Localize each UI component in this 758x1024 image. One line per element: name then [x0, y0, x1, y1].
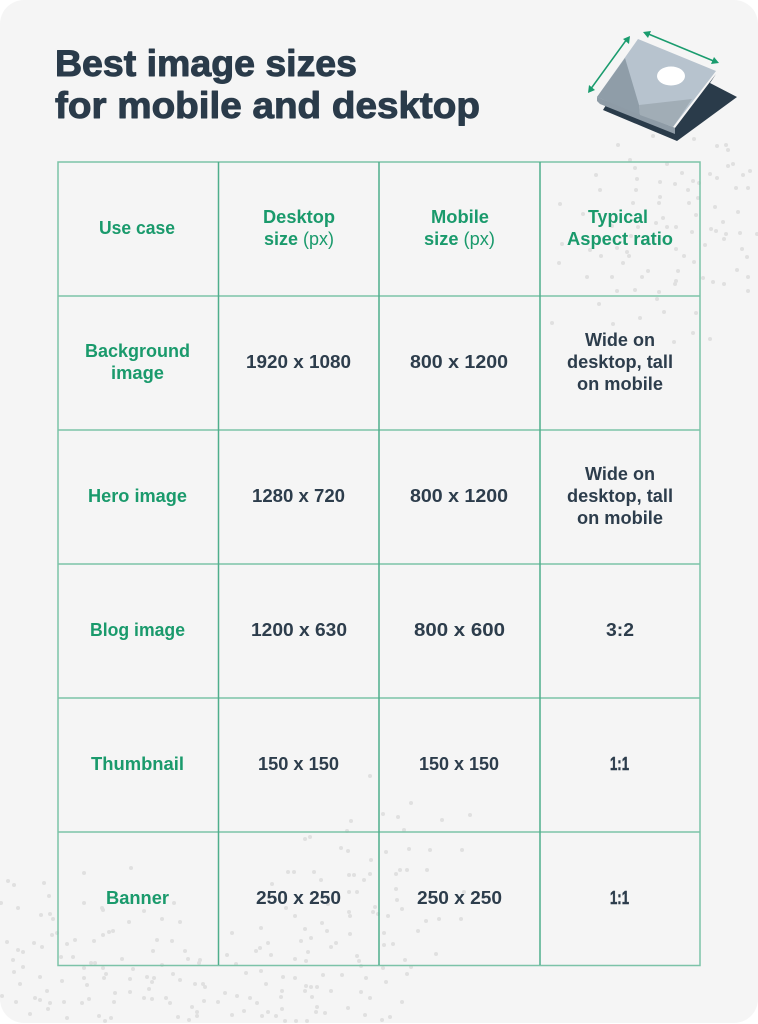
row: banner	[106, 888, 629, 908]
header: aspect ratio: Typical	[588, 207, 648, 227]
aspect ratio: desktop, tall	[567, 486, 673, 506]
header: desktop size: Desktop	[263, 207, 335, 227]
aspect ratio: 3:2	[606, 620, 634, 640]
aspect ratio: on mobile	[577, 374, 663, 394]
mobile size: 800 x 1200	[410, 486, 508, 506]
aspect ratio: on mobile	[577, 508, 663, 528]
mobile size: 150 x 150	[419, 754, 499, 774]
mobile size: 800 x 600	[414, 620, 505, 640]
mobile size: 800 x 1200	[410, 352, 508, 372]
aspect ratio: 1:1	[610, 888, 629, 908]
table grid	[58, 162, 700, 966]
aspect ratio	[567, 330, 673, 394]
aspect ratio: Wide on	[585, 330, 655, 350]
use case	[85, 341, 190, 383]
header: desktop size: size (px)	[264, 229, 334, 249]
desktop size: 1200 x 630	[251, 620, 347, 640]
aspect ratio	[567, 464, 673, 528]
desktop size: 250 x 250	[256, 888, 341, 908]
title	[55, 43, 480, 126]
aspect ratio: Wide on	[585, 464, 655, 484]
use case: Banner	[106, 888, 169, 908]
row: thumbnail	[91, 754, 629, 774]
header: desktop size	[263, 207, 335, 249]
use case: Blog image	[90, 620, 185, 640]
header row	[99, 207, 673, 249]
mobile size: 250 x 250	[417, 888, 502, 908]
header: mobile size: size (px)	[424, 229, 495, 249]
desktop size: 1280 x 720	[252, 486, 345, 506]
header: mobile size	[424, 207, 495, 249]
aspect ratio: 1:1	[610, 754, 629, 774]
title: for mobile and desktop	[55, 85, 480, 126]
use case: Background	[85, 341, 190, 361]
desktop size: 1920 x 1080	[246, 352, 351, 372]
row: blog image	[90, 620, 634, 640]
row: background image	[85, 330, 673, 394]
use case: Hero image	[88, 486, 187, 506]
title: Best image sizes	[55, 43, 357, 84]
use case: image	[111, 363, 164, 383]
header: aspect ratio: Aspect ratio	[567, 229, 673, 249]
row: hero image	[88, 464, 673, 528]
aspect ratio: desktop, tall	[567, 352, 673, 372]
header: aspect ratio	[567, 207, 673, 249]
header: mobile size: Mobile	[431, 207, 489, 227]
icon: image with dimension arrows	[588, 31, 737, 141]
desktop size: 150 x 150	[258, 754, 339, 774]
header: use case: Use case	[99, 218, 175, 238]
use case: Thumbnail	[91, 754, 184, 774]
